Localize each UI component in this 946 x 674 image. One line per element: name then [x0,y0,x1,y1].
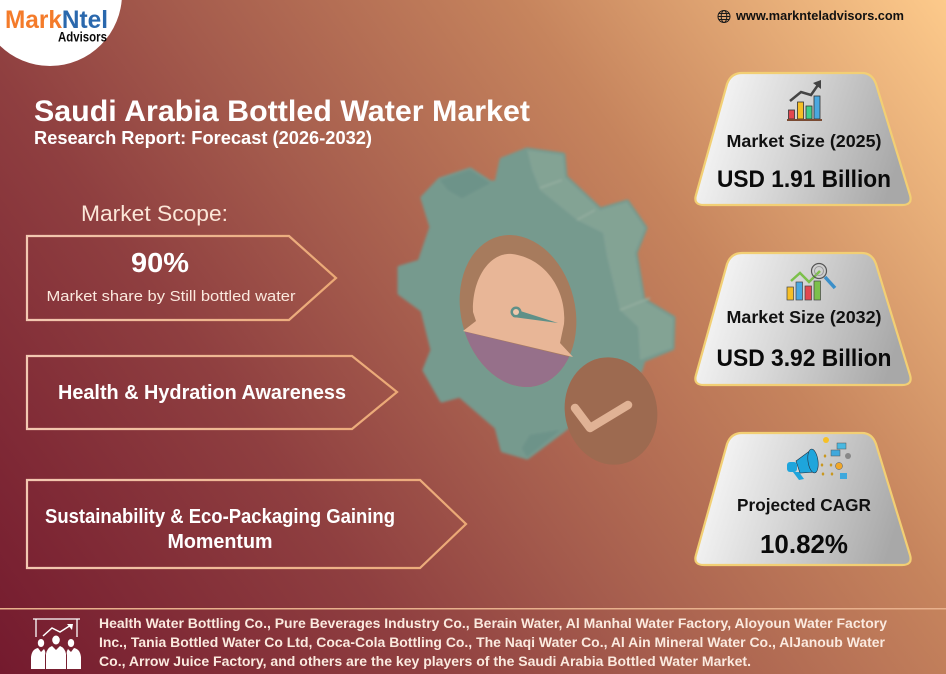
gauge dial face [463,254,573,357]
panel: health and hydration awareness: Health & Hydration Awareness [58,381,346,404]
icon: rising bar chart [787,80,822,121]
gauge outer ring [444,222,592,400]
icon: chart with magnifier [787,264,835,300]
text block: key players: Inc., Tania Bottled Water Co Ltd, Coca-Cola Bottling Co., The Naqi Water Co., Al Ain Mineral Water Co., AlJanoub Water [99,635,886,650]
website link: www.marknteladvisors.com [735,9,904,23]
panel: sustainability and eco-packaging: Sustainability & Eco-Packaging Gaining [45,505,395,528]
card: market size 2032 [695,253,911,385]
logo: MarkNtel Advisors: MarkNtel [5,6,108,34]
card: market size 2032: Market Size (2032) [726,307,882,327]
text block: key players: Co., Arrow Juice Factory, and others are the key players of the Saudi Arabia Bottled Water Market. [99,654,751,669]
gear silhouette [400,150,673,457]
illustration: gear with gauge and check badge [400,150,673,473]
footer divider [0,608,946,610]
heading: market scope: Market Scope: [81,201,228,226]
card: market size 2025: USD 1.91 Billion [717,166,891,193]
gauge needle [510,306,558,323]
card: projected CAGR [695,433,911,565]
icon: megaphone with sparkles [787,437,851,480]
card: market size 2025 [695,73,911,205]
title: Research Report: Forecast (2026-2032) [34,128,372,148]
title [34,95,530,148]
check badge [555,349,667,473]
card: market size 2032: USD 3.92 Billion [716,345,892,372]
icon: business team with presentation board [31,619,81,669]
logo: MarkNtel Advisors [0,0,122,66]
card: market size 2025: Market Size (2025) [726,131,882,151]
logo: MarkNtel Advisors: Advisors [58,30,107,44]
panel: sustainability and eco-packaging [27,480,466,568]
panel: 90% still bottled water: 90% [131,247,189,278]
text block: key players [99,616,888,669]
card: projected CAGR: 10.82% [760,529,848,559]
panel: health and hydration awareness [27,356,397,429]
title: Saudi Arabia Bottled Water Market [34,95,530,128]
gauge purple segment [464,332,569,387]
panel: 90% still bottled water: Market share by Still bottled water [46,288,296,305]
icon: globe [718,10,730,22]
text block: key players: Health Water Bottling Co., Pure Beverages Industry Co., Berain Water, Al Manhal Water Factory, Aloyoun Water Factory [99,616,888,631]
panel: 90% still bottled water [27,236,336,320]
panel: sustainability and eco-packaging: Momentum [168,530,272,553]
card: projected CAGR: Projected CAGR [737,495,871,515]
